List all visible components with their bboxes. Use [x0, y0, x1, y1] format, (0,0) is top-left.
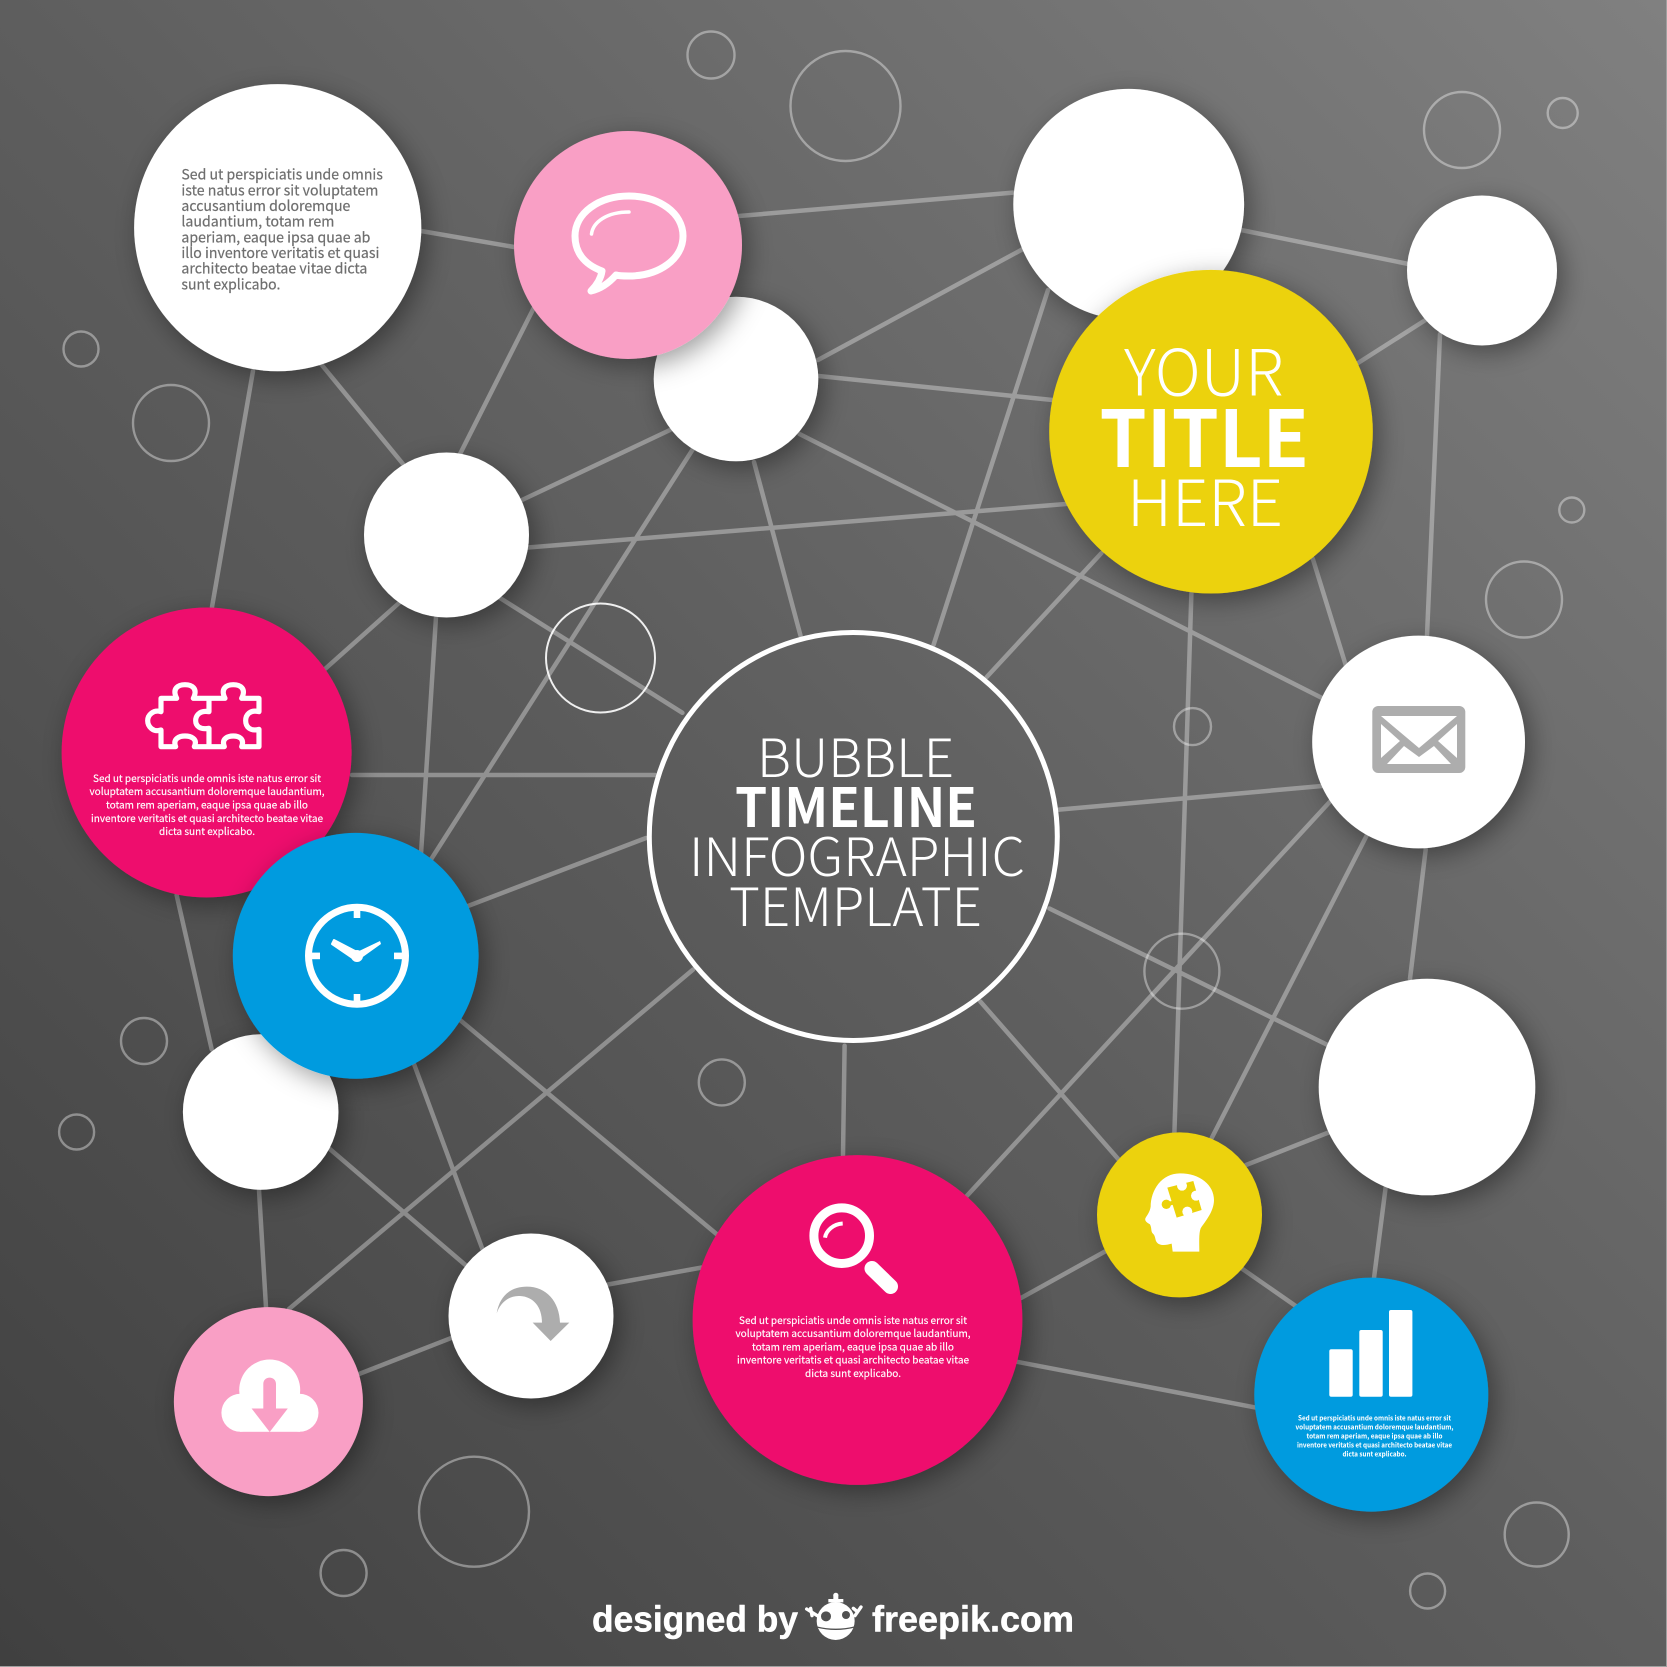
white bubble: text: [134, 84, 421, 371]
body text: dicta sunt explicabo.: [159, 823, 255, 838]
body text: voluptatem accusantium doloremque laudantium,: [1296, 1423, 1454, 1433]
title text: YOUR: [1124, 322, 1284, 414]
body text: sunt explicabo.: [181, 274, 280, 295]
credit: designed by freepik.com: [592, 1593, 1074, 1640]
body text: dicta sunt explicabo.: [1342, 1450, 1406, 1460]
body text: Sed ut perspiciatis unde omnis iste natus error sit: [1298, 1414, 1451, 1424]
icon: puzzle pieces: [148, 685, 259, 747]
title text: TITLE: [1100, 378, 1309, 490]
body text: inventore veritatis et quasi architecto beatae vitae: [91, 810, 323, 825]
body text: accusantium doloremque: [181, 195, 350, 216]
icon: magnifying glass: [814, 1208, 890, 1286]
body text: voluptatem accusantium doloremque laudantium,: [90, 783, 325, 798]
body text: illo inventore veritatis et quasi: [181, 242, 379, 263]
large white bubble top right: [1013, 89, 1244, 320]
icon: curved arrow: [497, 1287, 569, 1341]
icon: clock: [308, 907, 406, 1004]
body text: totam rem aperiam, eaque ipsa quae ab illo: [106, 796, 308, 812]
body text: iste natus error sit voluptatem: [181, 180, 378, 201]
credit: designed by freepik.com: freepik.com: [872, 1598, 1074, 1640]
magenta search bubble: [693, 1155, 1022, 1485]
white bubble left centre: [364, 452, 529, 618]
body text: inventore veritatis et quasi architecto beatae vitae: [737, 1352, 969, 1367]
body text: voluptatem accusantium doloremque laudantium,: [736, 1325, 971, 1340]
connector lines: [177, 193, 1440, 1407]
body text: inventore veritatis et quasi architecto beatae vitae: [1297, 1441, 1452, 1451]
pink download bubble: [174, 1307, 363, 1496]
yellow head bubble: [1097, 1132, 1262, 1297]
icon: bar chart: [1329, 1310, 1412, 1397]
title text: HERE: [1127, 453, 1283, 545]
magenta puzzle bubble: [62, 608, 352, 898]
yellow title bubble: [1049, 270, 1373, 594]
blue clock bubble: [233, 833, 479, 1079]
body text: totam rem aperiam, eaque ipsa quae ab illo: [752, 1338, 954, 1353]
white arrow bubble: [448, 1234, 614, 1398]
icon: head with puzzle: [1145, 1173, 1214, 1252]
body text: architecto beatae vitae dicta: [181, 258, 367, 279]
central title text: TEMPLATE: [729, 866, 982, 942]
icon: cloud download: [221, 1360, 318, 1432]
body text: aperiam, eaque ipsa quae ab: [181, 227, 371, 248]
body text: Sed ut perspiciatis unde omnis iste natus error sit: [93, 770, 321, 785]
small white bubble under chat: [654, 297, 818, 461]
white bubble lower left: [183, 1034, 338, 1190]
central title bubble: [649, 632, 1057, 1040]
body text: Sed ut perspiciatis unde omnis: [181, 164, 383, 185]
central title text: INFOGRAPHIC: [689, 816, 1025, 892]
body text: Sed ut perspiciatis unde omnis iste natus error sit: [739, 1312, 967, 1327]
icon: speech bubble: [575, 196, 683, 291]
icon: freepik logo: [807, 1593, 861, 1640]
central title text: BUBBLE: [757, 717, 954, 793]
white bubble top far right: [1407, 196, 1557, 346]
highlighted thin outline circle: [546, 604, 655, 712]
white envelope bubble: [1312, 636, 1525, 848]
body text: dicta sunt explicabo.: [805, 1365, 901, 1380]
body text: laudantium, totam rem: [181, 211, 334, 232]
body text: totam rem aperiam, eaque ipsa quae ab illo: [1306, 1432, 1443, 1442]
white bubble lower right: [1319, 979, 1535, 1195]
blue chart bubble: [1254, 1278, 1488, 1512]
central title text: TIMELINE: [735, 764, 977, 843]
credit: designed by freepik.com: designed by: [592, 1598, 798, 1640]
icon: envelope: [1372, 706, 1465, 773]
pink chat bubble: [514, 131, 742, 359]
